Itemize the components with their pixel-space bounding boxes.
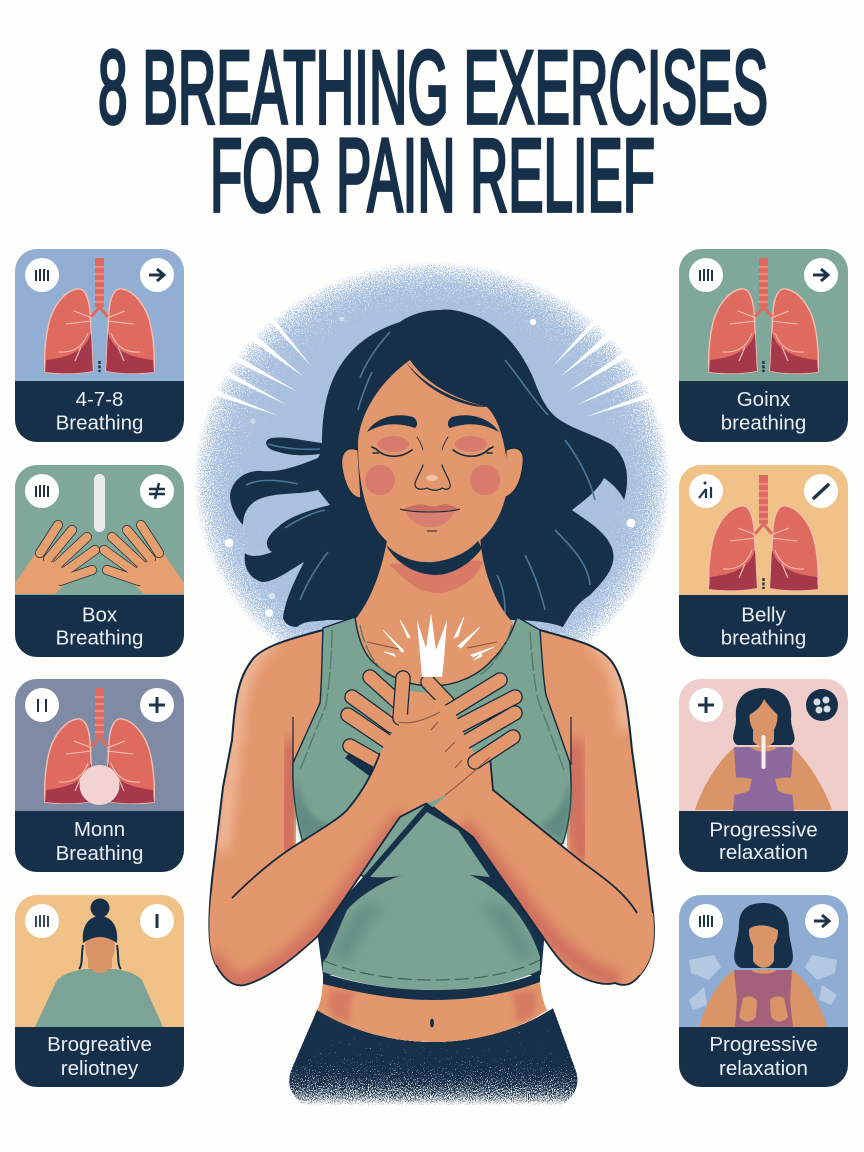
icon: bar badge — [140, 904, 174, 938]
lower tank front — [323, 812, 540, 990]
woman illustration — [209, 309, 654, 1126]
card background — [15, 249, 184, 381]
face — [358, 360, 508, 562]
icon: figure badge — [689, 474, 723, 508]
waistband — [323, 972, 540, 1000]
lips — [400, 504, 460, 531]
card background — [679, 465, 848, 595]
icon: slash badge — [804, 474, 838, 508]
pale splashes — [689, 955, 837, 1010]
person with hair bun — [35, 898, 163, 1027]
icon: left badge — [25, 688, 59, 722]
card background — [15, 465, 184, 595]
icon: left badge — [25, 258, 59, 292]
chest glow — [383, 613, 494, 677]
neck shadow blush — [390, 561, 483, 593]
chin shadow — [386, 541, 482, 575]
label band — [15, 811, 184, 872]
label band — [679, 381, 848, 442]
person with fists at chest — [699, 903, 827, 1027]
card background — [15, 895, 184, 1027]
label: Breathing — [56, 626, 143, 650]
label band — [15, 595, 184, 657]
icon: left badge — [689, 904, 723, 938]
pants: stippled fade — [289, 1008, 578, 1126]
upper hand — [380, 678, 515, 803]
ears — [342, 448, 523, 498]
label: Progressive — [709, 1033, 818, 1056]
lungs — [45, 258, 154, 373]
icon: left badge — [25, 474, 59, 508]
label band — [679, 595, 848, 657]
collarbones — [367, 642, 497, 649]
label: Box — [82, 604, 118, 626]
label: Monn — [74, 818, 125, 841]
floating particles — [225, 317, 635, 617]
icon: arrow badge — [804, 258, 838, 292]
label: relaxation — [719, 841, 808, 864]
upper right arm — [535, 630, 654, 985]
label: Brogreative — [47, 1033, 152, 1056]
hands — [15, 525, 184, 594]
radiating light rays — [202, 316, 661, 417]
card: 4-7-8 Breathing — [15, 249, 184, 442]
lower hand — [345, 677, 460, 790]
belly — [317, 982, 547, 1042]
closed eyes — [372, 447, 493, 456]
icon: arrow badge — [805, 904, 839, 938]
label band — [679, 1027, 848, 1087]
card background — [679, 679, 848, 811]
label: 4-7-8 — [76, 388, 123, 411]
lungs — [709, 258, 818, 373]
label: breathing — [721, 626, 806, 650]
hair — [230, 309, 627, 627]
label band — [15, 1027, 184, 1087]
icon: left badge — [689, 258, 723, 292]
nose highlight — [426, 475, 438, 481]
card: Progressive relaxation, pink — [679, 679, 848, 872]
label: Belly — [741, 604, 786, 626]
icon: dots badge — [806, 689, 838, 721]
label: Breathing — [56, 842, 143, 865]
card: Brogreative reliotney — [15, 895, 184, 1087]
title — [98, 30, 768, 234]
card: Belly breathing — [679, 465, 848, 657]
person with hands on chest — [695, 688, 832, 811]
card background — [15, 679, 184, 811]
lower torso navy shadow — [317, 803, 545, 975]
lungs with pale circle — [45, 688, 154, 805]
right forearm — [433, 757, 654, 985]
icon: plus badge — [689, 688, 723, 722]
neck and chest — [345, 535, 522, 700]
card background — [679, 895, 848, 1027]
spine beads — [94, 474, 105, 532]
label: relaxation — [719, 1057, 808, 1080]
belly shading — [329, 990, 536, 1022]
card: Goinx breathing — [679, 249, 848, 442]
icon: left badge — [25, 904, 59, 938]
halo: blue stippled glow behind figure — [170, 240, 694, 720]
label: Breathing — [56, 412, 143, 434]
eyelid blush — [377, 436, 409, 452]
upper left arm — [208, 629, 322, 966]
label: Goinx — [737, 388, 791, 411]
label band — [679, 811, 848, 872]
icon: plus badge — [140, 688, 174, 722]
card: Monn Breathing — [15, 679, 184, 872]
nose — [415, 437, 450, 490]
eyebrows — [367, 415, 499, 432]
label: reliotney — [61, 1057, 139, 1080]
card: Box Breathing — [15, 465, 184, 657]
icon: divide badge — [140, 474, 174, 508]
label band — [15, 381, 184, 442]
lungs — [709, 475, 818, 590]
cheeks — [365, 465, 395, 495]
fringe strand — [406, 362, 487, 407]
card background — [679, 249, 848, 381]
tank top — [293, 617, 571, 880]
card: Progressive relaxation, blue — [679, 895, 848, 1087]
icon: arrow badge — [140, 258, 174, 292]
label: Progressive — [709, 818, 818, 842]
left forearm — [209, 748, 476, 986]
label: breathing — [721, 412, 806, 434]
navel — [430, 1018, 434, 1028]
